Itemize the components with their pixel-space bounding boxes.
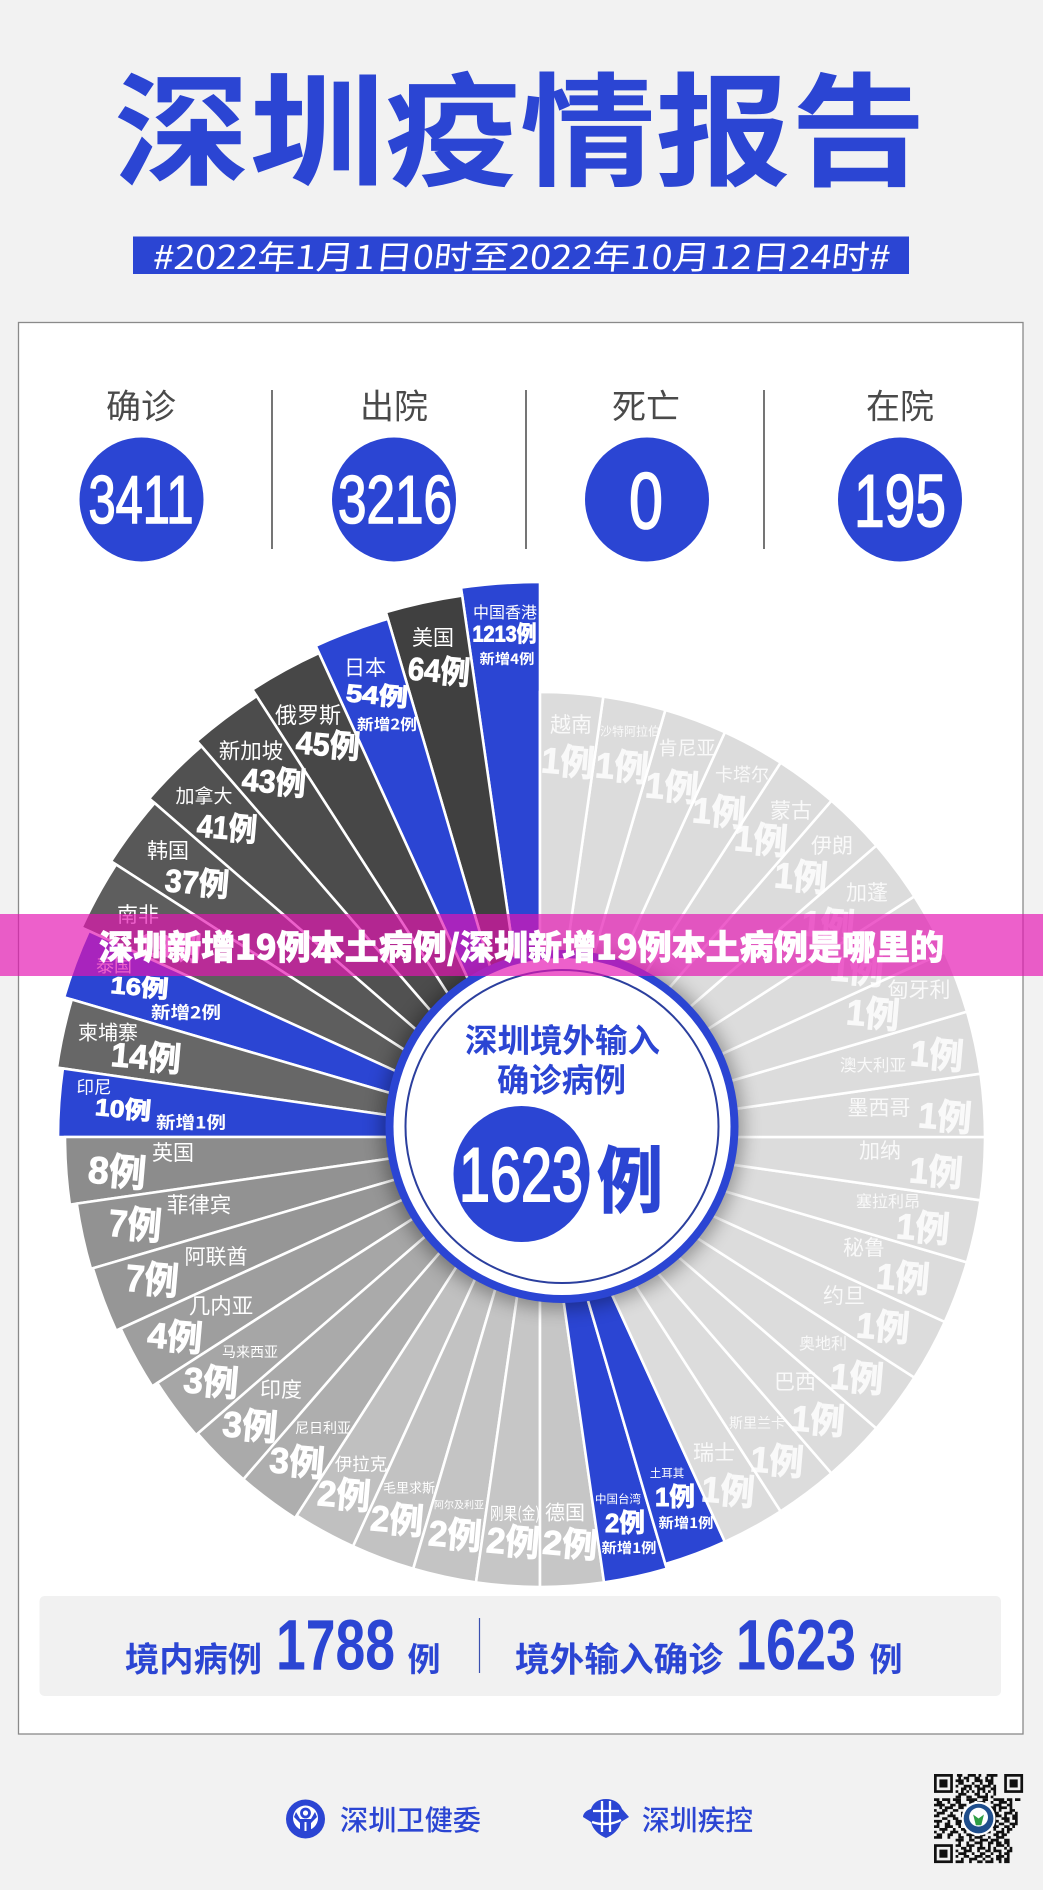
label: 墨西哥 [848, 1092, 973, 1140]
label: 斯里兰卡: 斯里兰卡 [729, 1413, 785, 1433]
label: 几内亚: 4例 [146, 1314, 204, 1360]
hub heading: 深圳境外输入 [465, 1015, 660, 1062]
hub number circle [454, 1106, 590, 1242]
label: 中国台湾 [595, 1491, 656, 1558]
label: 瑞士: 1例 [700, 1468, 756, 1514]
title: 深圳疫情报告 [114, 34, 926, 212]
label: 约旦 [823, 1280, 911, 1350]
label: 肯尼亚: 1例 [644, 764, 700, 810]
label: 巴西 [774, 1366, 846, 1443]
label: 柬埔寨 [78, 1016, 183, 1080]
label: 印度: 印度 [260, 1374, 302, 1404]
label: 肯尼亚 [644, 734, 716, 810]
label: 卡塔尔 [691, 761, 769, 835]
label: 柬埔寨: 柬埔寨 [78, 1016, 138, 1046]
label: 泰国: 新增2例 [151, 998, 221, 1024]
label: 澳大利亚 [840, 1032, 965, 1078]
label: 约旦: 1例 [855, 1304, 911, 1350]
label: 斯里兰卡: 1例 [749, 1438, 805, 1484]
stat: 死亡 [585, 380, 709, 562]
label: 毛里求斯: 2例 [369, 1497, 425, 1543]
label: 菲律宾 [107, 1188, 231, 1249]
label: 匈牙利: 匈牙利 [888, 974, 950, 1004]
domestic cases unit: 例 [408, 1633, 440, 1681]
label: 沙特阿拉伯: 1例 [594, 744, 650, 790]
label: 土耳其: 新增1例 [658, 1513, 714, 1533]
label: 奥地利: 奥地利 [799, 1330, 847, 1354]
summary box [40, 1596, 1001, 1696]
label: 越南: 越南 [550, 709, 592, 739]
stat: 确诊: 3411 [88, 462, 194, 538]
label: 德国: 2例 [541, 1524, 599, 1566]
label: 阿联酋: 7例 [124, 1258, 180, 1304]
label: 阿联酋 [124, 1241, 248, 1304]
stat: 死亡: 0 [629, 456, 663, 545]
label: 韩国: 37例 [164, 862, 230, 904]
label: 俄罗斯: 45例 [295, 724, 361, 766]
label: 马来西亚: 马来西亚 [222, 1342, 278, 1362]
band headline: 深圳新增19例本土病例/深圳新增19例本土病例是哪里的 [99, 920, 944, 970]
label: 美国: 美国 [412, 622, 454, 652]
logo: 深圳卫健委 [286, 1799, 481, 1839]
label: 刚果(金): 刚果(金) [490, 1500, 540, 1524]
label: 中国香港: 新增4例 [480, 649, 534, 669]
stat: 出院: 3216 [338, 462, 452, 538]
label: 美国 [407, 622, 471, 692]
label: 新加坡: 新加坡 [219, 734, 283, 766]
label: 斯里兰卡 [729, 1413, 805, 1484]
label: 越南: 1例 [540, 739, 596, 785]
label: 卡塔尔: 1例 [691, 789, 747, 835]
label: 德国: 德国 [545, 1496, 585, 1526]
label: 加拿大: 41例 [196, 807, 258, 849]
hub number circle: 1623 [459, 1133, 583, 1218]
label: 伊朗: 伊朗 [811, 830, 853, 860]
label: 加蓬 [800, 877, 888, 948]
label: 中国香港: 中国香港 [473, 599, 537, 623]
label: 墨西哥: 1例 [917, 1094, 973, 1140]
label: 菲律宾: 菲律宾 [167, 1188, 231, 1220]
stat: 死亡: 死亡 [612, 380, 680, 428]
label: 加纳 [859, 1135, 964, 1195]
label: 秘鲁 [843, 1232, 931, 1301]
label: 土耳其: 1例 [655, 1482, 695, 1512]
label: 中国台湾: 2例 [605, 1508, 645, 1538]
imported cases label: 境外输入确诊 [515, 1632, 724, 1682]
label: 尼日利亚 [268, 1418, 351, 1485]
label: 泰国 [96, 952, 221, 1024]
label: 秘鲁: 秘鲁 [843, 1232, 885, 1262]
label: 刚果(金): 2例 [485, 1519, 541, 1565]
label: 加纳: 1例 [908, 1149, 964, 1195]
label: 匈牙利 [845, 974, 950, 1037]
label: 新加坡: 43例 [241, 761, 307, 803]
label: 俄罗斯 [275, 698, 361, 766]
org name: 深圳卫健委 [340, 1799, 481, 1839]
label: 南非 [117, 899, 202, 968]
label: 中国台湾: 中国台湾 [595, 1491, 641, 1507]
label: 英国: 8例 [86, 1150, 148, 1196]
pink overlay band [0, 914, 1043, 976]
label: 印尼: 新增1例 [156, 1108, 226, 1134]
label: 越南 [540, 709, 596, 785]
label: 韩国 [147, 835, 230, 904]
label: 卡塔尔: 卡塔尔 [715, 761, 769, 787]
label: sector under band: 1例 [829, 947, 885, 993]
center hub shadow [381, 947, 743, 1309]
label: 南非: 南非 [117, 899, 159, 929]
stat: 确诊 [80, 380, 204, 562]
label: 刚果(金) [485, 1500, 541, 1565]
label: 日本: 日本 [344, 652, 386, 682]
label: 毛里求斯: 毛里求斯 [383, 1478, 435, 1496]
label: 瑞士: 瑞士 [693, 1437, 735, 1467]
hub unit: 例 [597, 1122, 663, 1228]
label: 秘鲁: 1例 [875, 1255, 931, 1301]
label: 奥地利 [799, 1330, 885, 1401]
label: 新加坡 [219, 734, 307, 803]
label: 柬埔寨: 14例 [109, 1036, 183, 1080]
label: 印度: 3例 [221, 1403, 279, 1449]
label: 俄罗斯: 俄罗斯 [275, 698, 341, 730]
label: 约旦: 约旦 [823, 1280, 865, 1310]
label: 泰国: 泰国 [96, 952, 132, 978]
label: 中国香港: 1213例 [472, 622, 536, 646]
label: 几内亚 [146, 1290, 253, 1360]
label: 印度 [221, 1374, 302, 1449]
label: 印尼: 10例 [94, 1094, 152, 1126]
label: 伊朗: 1例 [773, 854, 829, 900]
label: 毛里求斯 [369, 1478, 435, 1543]
label: 中国香港 [472, 599, 537, 669]
label: 日本: 54例 [345, 679, 409, 713]
label: 巴西: 1例 [790, 1397, 846, 1443]
label: 加纳: 加纳 [859, 1135, 901, 1165]
label: 瑞士 [693, 1437, 756, 1514]
label: 伊朗 [773, 830, 853, 900]
label: 奥地利: 1例 [829, 1355, 885, 1401]
label: 墨西哥: 墨西哥 [848, 1092, 910, 1122]
label: 沙特阿拉伯 [594, 722, 660, 790]
label: 加拿大 [175, 782, 258, 849]
imported cases number: 1623 [736, 1606, 856, 1686]
label: 韩国: 韩国 [147, 835, 189, 865]
label: 伊拉克: 2例 [316, 1472, 372, 1518]
label: 阿尔及利亚: 阿尔及利亚 [434, 1496, 484, 1512]
logo: 深圳疾控 [583, 1799, 753, 1839]
org name: 深圳疾控 [642, 1799, 753, 1839]
label: 阿尔及利亚: 2例 [427, 1512, 483, 1558]
stat: 在院: 在院 [866, 380, 934, 428]
label: 塞拉利昂: 塞拉利昂 [856, 1188, 920, 1212]
label: 美国: 64例 [407, 650, 471, 692]
label: 巴西: 巴西 [774, 1366, 816, 1396]
label: 尼日利亚: 尼日利亚 [295, 1418, 351, 1438]
label: 伊拉克: 伊拉克 [335, 1452, 387, 1476]
label: 德国 [541, 1496, 599, 1566]
label: 英国 [86, 1137, 194, 1196]
domestic cases number: 1788 [276, 1606, 395, 1686]
label: 塞拉利昂 [856, 1188, 951, 1251]
label: 泰国: 16例 [109, 972, 170, 1004]
stat: 在院: 195 [854, 460, 946, 542]
label: 沙特阿拉伯: 沙特阿拉伯 [600, 722, 660, 740]
label: 澳大利亚: 1例 [909, 1032, 965, 1078]
panel: main white card [18, 322, 1023, 1734]
label: 日本: 新增2例 [357, 714, 417, 734]
chart: radial sector pie of imported cases [52, 582, 989, 1592]
center hub: total imported cases [386, 950, 738, 1303]
label: 马来西亚: 3例 [182, 1359, 240, 1405]
label: 尼日利亚: 3例 [268, 1439, 326, 1485]
label: 印尼: 印尼 [76, 1074, 112, 1100]
label: 南非: 19例 [138, 926, 202, 968]
date banner: #2022年1月1日0时至2022年10月12日24时# [151, 231, 893, 279]
label: 伊拉克 [316, 1452, 387, 1518]
label: 蒙古: 1例 [733, 817, 789, 863]
emblem [286, 1800, 325, 1838]
label: 加蓬: 1例 [800, 902, 856, 948]
label: 加拿大: 加拿大 [175, 782, 233, 808]
label: 中国台湾: 新增1例 [602, 1538, 656, 1558]
label: 几内亚: 几内亚 [189, 1290, 253, 1320]
stat: 出院: 出院 [360, 380, 428, 428]
domestic cases label: 境内病例 [125, 1632, 262, 1682]
label: 肯尼亚: 肯尼亚 [658, 734, 716, 760]
label: 英国: 英国 [152, 1137, 194, 1167]
QR code [934, 1775, 1022, 1862]
label: 蒙古 [733, 795, 812, 863]
label: 日本 [344, 652, 417, 734]
label: 印尼 [76, 1074, 226, 1134]
label: 加蓬: 加蓬 [846, 877, 888, 907]
label: 塞拉利昂: 1例 [895, 1205, 951, 1251]
label: 土耳其 [650, 1465, 714, 1533]
imported cases unit: 例 [870, 1633, 902, 1681]
label: 阿联酋: 阿联酋 [184, 1241, 248, 1271]
label: 马来西亚 [182, 1342, 278, 1405]
label: 蒙古: 蒙古 [770, 795, 812, 825]
label: 土耳其: 土耳其 [650, 1465, 684, 1481]
label: 澳大利亚: 澳大利亚 [840, 1052, 906, 1076]
label: 菲律宾: 7例 [107, 1203, 163, 1249]
label: 匈牙利: 1例 [845, 991, 901, 1037]
hub subheading: 确诊病例 [497, 1054, 626, 1102]
shield emblem [583, 1799, 629, 1838]
stat: 出院 [332, 380, 456, 562]
stat: 确诊: 确诊 [106, 380, 176, 428]
stat: 在院 [838, 380, 962, 562]
